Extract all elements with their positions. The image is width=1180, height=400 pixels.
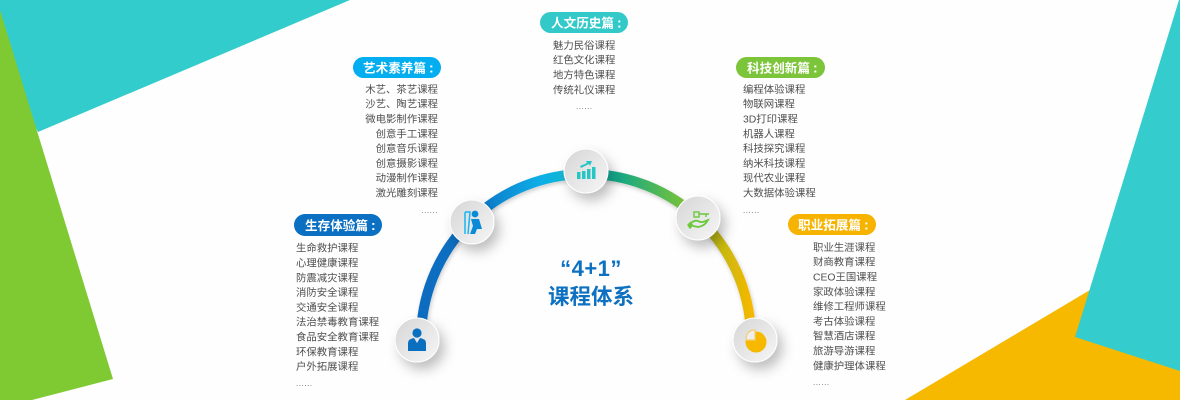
course list: 纳米科技课程 bbox=[743, 157, 805, 170]
heading pill bbox=[353, 57, 441, 78]
course list: 考古体验课程 bbox=[813, 315, 875, 328]
course list: 机器人课程 bbox=[743, 127, 795, 140]
heading pill: : bbox=[617, 14, 622, 30]
course list: ...... bbox=[421, 206, 438, 215]
course list bbox=[296, 242, 379, 388]
course list: ...... bbox=[576, 102, 593, 111]
node: art, seated figure icon bbox=[450, 200, 494, 244]
course list: 3D打印课程 bbox=[743, 112, 798, 126]
course list: 旅游导游课程 bbox=[813, 344, 875, 358]
course list: 创意摄影课程 bbox=[376, 157, 438, 170]
course list: 地方特色课程 bbox=[553, 68, 615, 82]
node: technology, key in hand icon bbox=[676, 196, 720, 240]
course list: 智慧酒店课程 bbox=[813, 330, 875, 343]
corner shape: teal top left bbox=[0, 0, 350, 132]
center title bbox=[548, 256, 634, 309]
corner shape: yellow bottom right bbox=[905, 287, 1180, 400]
panel: humanities and history bbox=[540, 12, 628, 111]
course list: 交通安全课程 bbox=[296, 301, 358, 314]
panel: technology innovation bbox=[736, 57, 825, 215]
heading pill: 生存体验篇 bbox=[305, 219, 368, 233]
course list: 财商教育课程 bbox=[813, 256, 875, 269]
course list: 生命救护课程 bbox=[296, 242, 358, 255]
course list: 户外拓展课程 bbox=[296, 360, 358, 373]
heading pill: : bbox=[864, 216, 869, 232]
course list: ...... bbox=[743, 206, 760, 215]
course list: 维修工程师课程 bbox=[813, 300, 886, 313]
center title: “4+1” bbox=[560, 256, 622, 281]
icon: seated figure bbox=[465, 211, 482, 234]
center title: 课程体系 bbox=[548, 285, 634, 309]
course list: 创意手工课程 bbox=[376, 127, 438, 140]
heading pill bbox=[736, 57, 825, 78]
course list: CEO王国课程 bbox=[813, 272, 877, 284]
course list bbox=[813, 241, 886, 387]
course list: 家政体验课程 bbox=[813, 285, 875, 298]
heading pill bbox=[294, 214, 382, 236]
course list: 传统礼仪课程 bbox=[553, 83, 615, 96]
heading pill: 职业拓展篇 bbox=[798, 218, 861, 232]
heading pill bbox=[540, 12, 628, 33]
heading pill: : bbox=[813, 60, 818, 76]
course list: ...... bbox=[813, 378, 830, 387]
panel: career development bbox=[788, 214, 886, 387]
corner shape: teal right bbox=[1075, 0, 1180, 371]
course list: 法治禁毒教育课程 bbox=[296, 316, 379, 329]
node: career, pie chart icon bbox=[733, 318, 777, 362]
course list: 魅力民俗课程 bbox=[553, 39, 615, 52]
heading pill: 科技创新篇 bbox=[747, 62, 810, 76]
course list bbox=[553, 39, 615, 111]
course list: 动漫制作课程 bbox=[376, 172, 438, 185]
course list: 食品安全教育课程 bbox=[296, 330, 379, 344]
heading pill: 人文历史篇 bbox=[551, 16, 614, 30]
icon: pie chart bbox=[746, 330, 766, 352]
icon: rising bars bbox=[577, 161, 596, 179]
course list: 大数据体验课程 bbox=[743, 186, 816, 200]
course list: 环保教育课程 bbox=[296, 345, 358, 358]
heading pill: : bbox=[371, 217, 376, 233]
course list: 防震减灾课程 bbox=[296, 271, 358, 284]
panel: survival experience bbox=[294, 214, 382, 388]
course list: 创意音乐课程 bbox=[376, 142, 438, 155]
course list: 激光雕刻课程 bbox=[376, 186, 438, 200]
course list: 健康护理体课程 bbox=[813, 359, 886, 372]
course list: 心理健康课程 bbox=[296, 256, 358, 270]
course list bbox=[743, 83, 816, 215]
course list: 消防安全课程 bbox=[296, 286, 358, 299]
heading pill bbox=[788, 214, 876, 235]
node: survival, person icon bbox=[395, 318, 439, 362]
course list: 木艺、茶艺课程 bbox=[365, 83, 438, 96]
course list: 物联网课程 bbox=[743, 98, 795, 111]
corner shape: green left bbox=[0, 10, 113, 400]
curved arc connecting the five nodes bbox=[421, 174, 751, 339]
panel: art literacy bbox=[353, 57, 441, 215]
node: humanities, bar chart icon bbox=[564, 149, 608, 193]
course list: ...... bbox=[296, 379, 313, 388]
course list: 现代农业课程 bbox=[743, 172, 805, 185]
course list: 编程体验课程 bbox=[743, 83, 805, 96]
icon: person in suit bbox=[408, 328, 426, 351]
heading pill: : bbox=[429, 60, 434, 76]
heading pill: 艺术素养篇 bbox=[363, 62, 426, 76]
icon: key and hand bbox=[688, 212, 709, 228]
course list: 沙艺、陶艺课程 bbox=[365, 98, 438, 111]
course list: 职业生涯课程 bbox=[813, 241, 875, 254]
course list: 红色文化课程 bbox=[553, 54, 615, 67]
course list: 微电影制作课程 bbox=[365, 112, 438, 126]
course list: 科技探究课程 bbox=[743, 142, 805, 155]
course list bbox=[365, 83, 438, 215]
